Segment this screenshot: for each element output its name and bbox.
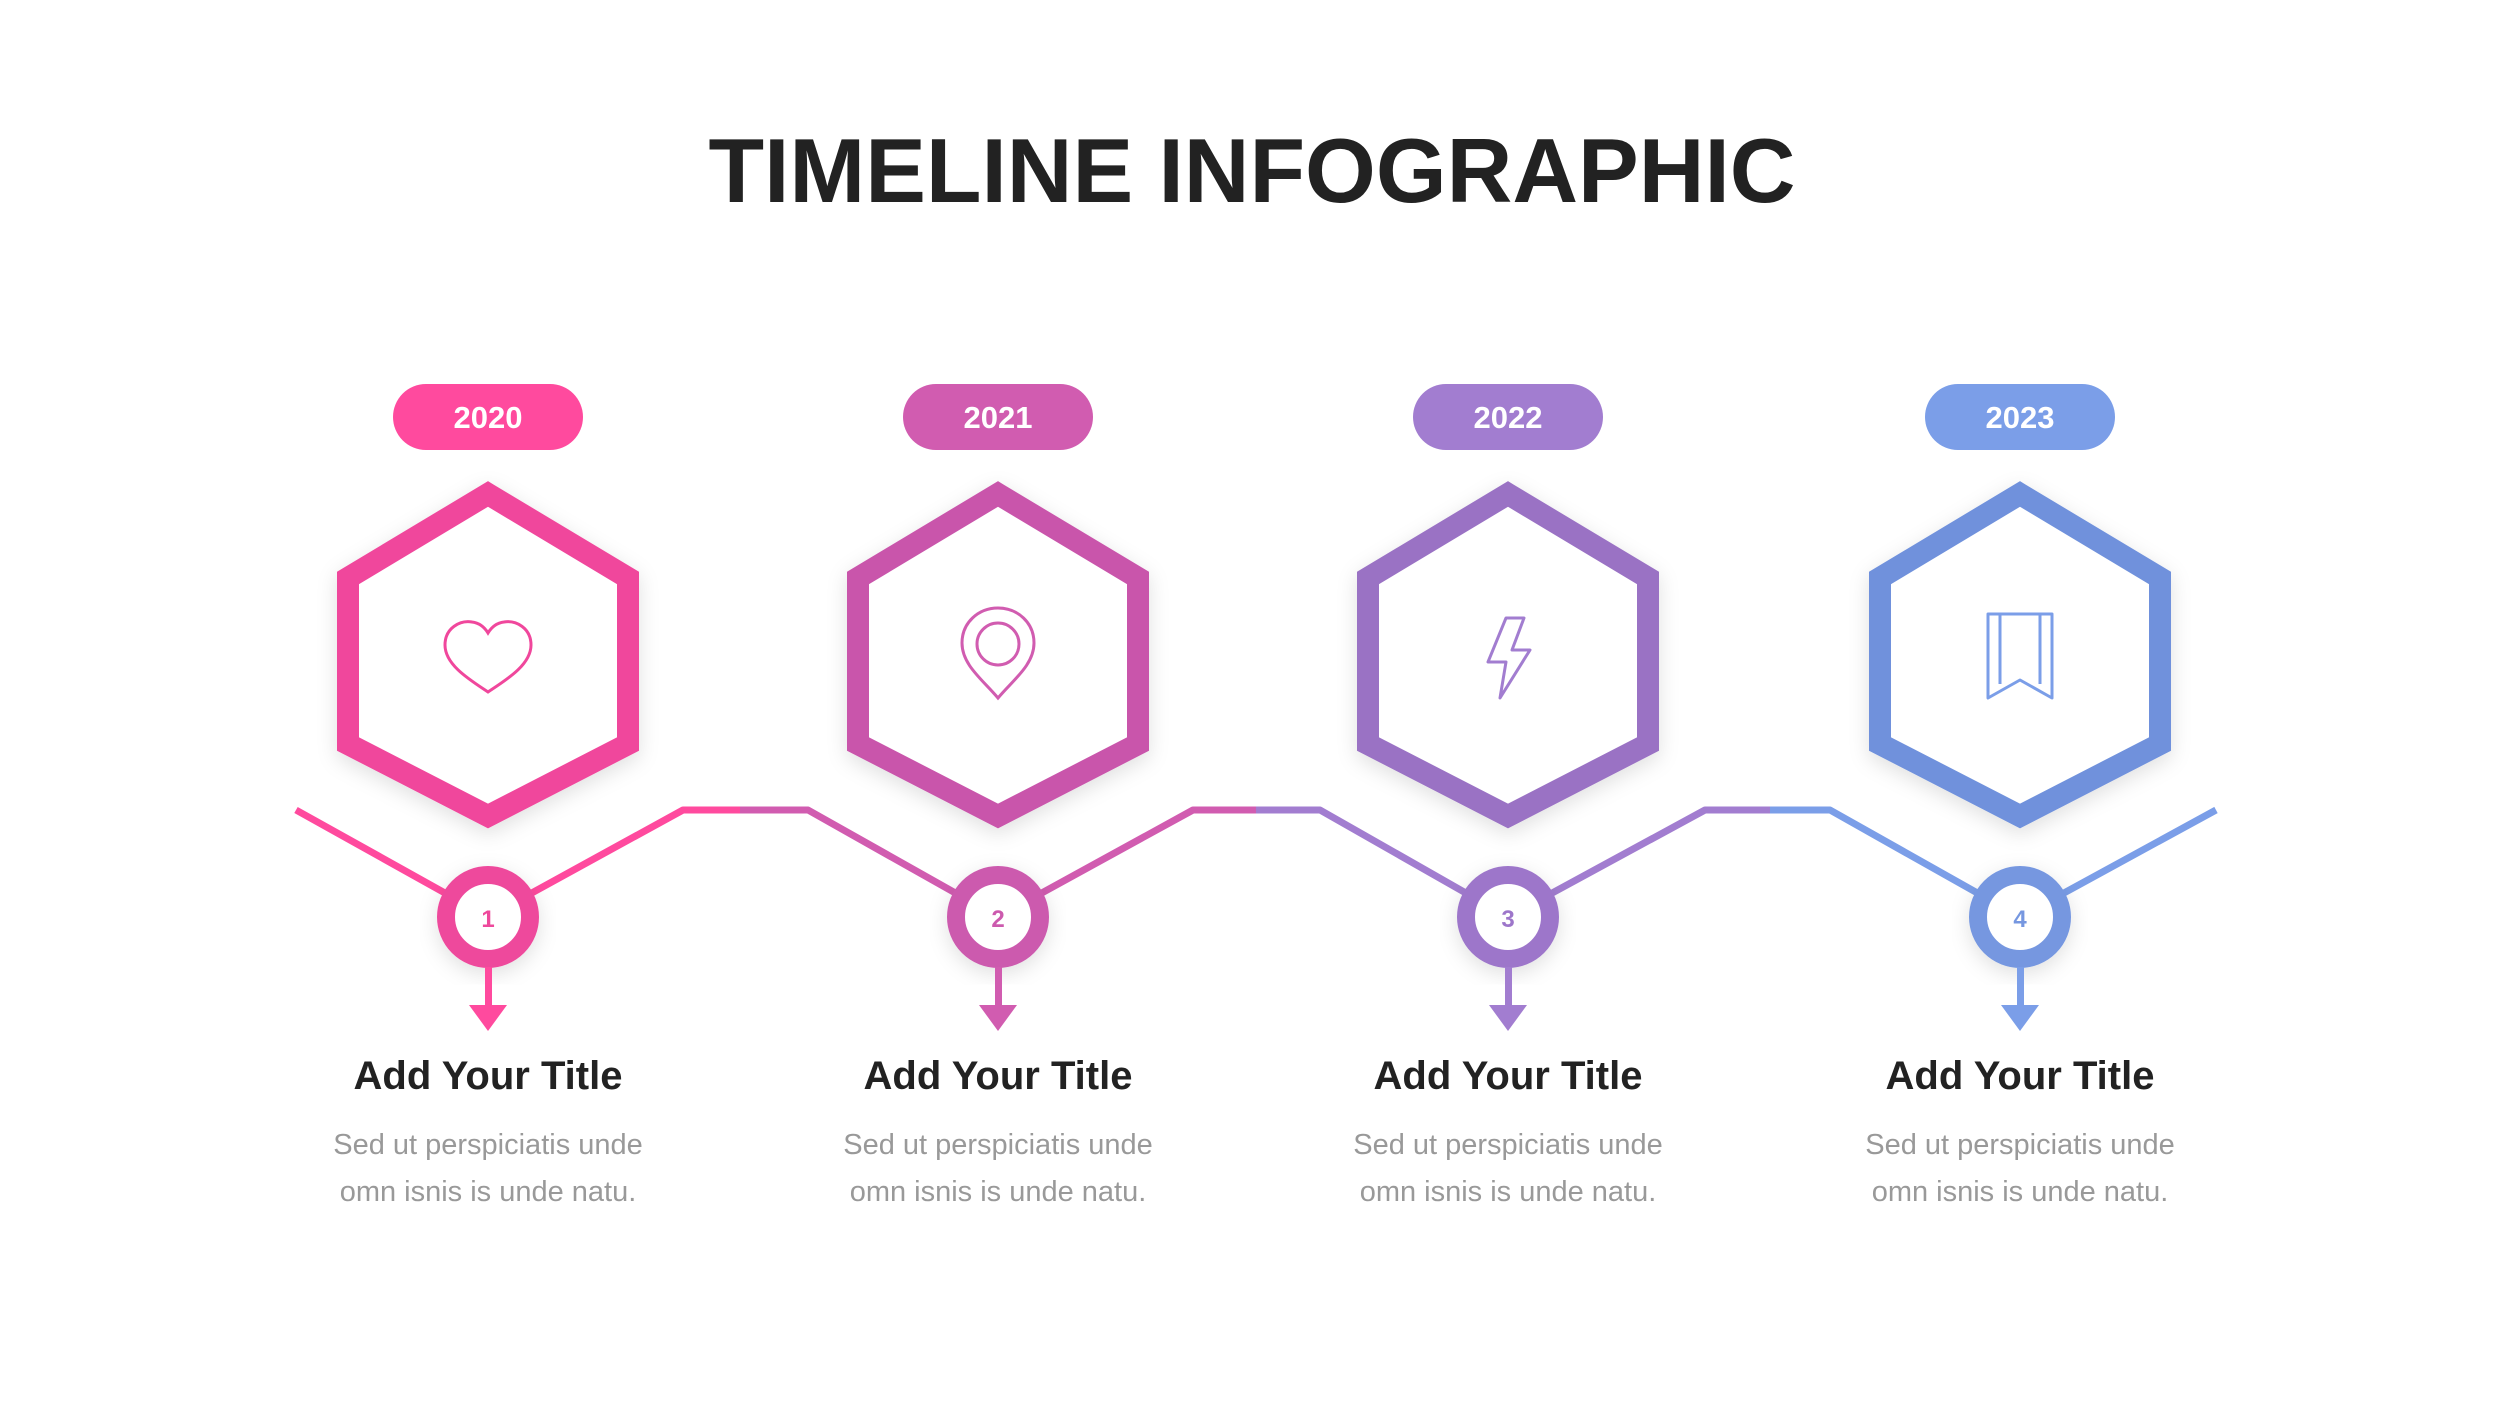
description 2: omn isnis is unde natu.	[850, 1176, 1146, 1208]
number circle 4: 4	[2013, 906, 2027, 933]
year pill 2020: 2020	[454, 400, 522, 435]
number circle 1: 1	[481, 906, 495, 933]
number circle 1	[446, 875, 530, 959]
arrow 4	[2001, 967, 2039, 1031]
hexagon 1	[348, 494, 628, 816]
icon: location pin	[962, 608, 1034, 698]
description 4: Sed ut perspiciatis unde	[1865, 1129, 2175, 1161]
description 4: omn isnis is unde natu.	[1872, 1176, 2168, 1208]
step 2	[843, 384, 1153, 1208]
number circle 3: 3	[1501, 906, 1515, 933]
description 3: omn isnis is unde natu.	[1360, 1176, 1656, 1208]
year pill 2022: 2022	[1474, 400, 1542, 435]
step title 3: Add Your Title	[1374, 1054, 1642, 1098]
year pill 2023: 2023	[1986, 400, 2054, 435]
description 1: Sed ut perspiciatis unde	[333, 1129, 643, 1161]
step title 4: Add Your Title	[1886, 1054, 2154, 1098]
year pill 2021	[903, 384, 1093, 450]
description 1: omn isnis is unde natu.	[340, 1176, 636, 1208]
number circle 4	[1978, 875, 2062, 959]
description 2	[843, 1129, 1153, 1208]
year pill 2022	[1413, 384, 1603, 450]
year pill 2021: 2021	[964, 400, 1032, 435]
step 3	[1353, 384, 1663, 1208]
step 1	[333, 384, 643, 1208]
connecting zigzag line	[296, 810, 2216, 917]
step title 1: Add Your Title	[354, 1054, 622, 1098]
description 3	[1353, 1129, 1663, 1208]
hexagon 3	[1368, 494, 1648, 816]
year pill 2023	[1925, 384, 2115, 450]
arrow 3	[1489, 967, 1527, 1031]
icon: lightning	[1488, 618, 1530, 698]
icon: bookmark	[1988, 614, 2052, 698]
hexagon 4	[1880, 494, 2160, 816]
description 2: Sed ut perspiciatis unde	[843, 1129, 1153, 1161]
number circle 2: 2	[991, 906, 1005, 933]
number circle 3	[1466, 875, 1550, 959]
arrow 2	[979, 967, 1017, 1031]
step title 2: Add Your Title	[864, 1054, 1132, 1098]
icon: heart	[445, 622, 531, 692]
title: TIMELINE INFOGRAPHIC	[709, 121, 1795, 222]
arrow 1	[469, 967, 507, 1031]
description 1	[333, 1129, 643, 1208]
step 4	[1865, 384, 2175, 1208]
number circle 2	[956, 875, 1040, 959]
description 3: Sed ut perspiciatis unde	[1353, 1129, 1663, 1161]
description 4	[1865, 1129, 2175, 1208]
year pill 2020	[393, 384, 583, 450]
hexagon 2	[858, 494, 1138, 816]
